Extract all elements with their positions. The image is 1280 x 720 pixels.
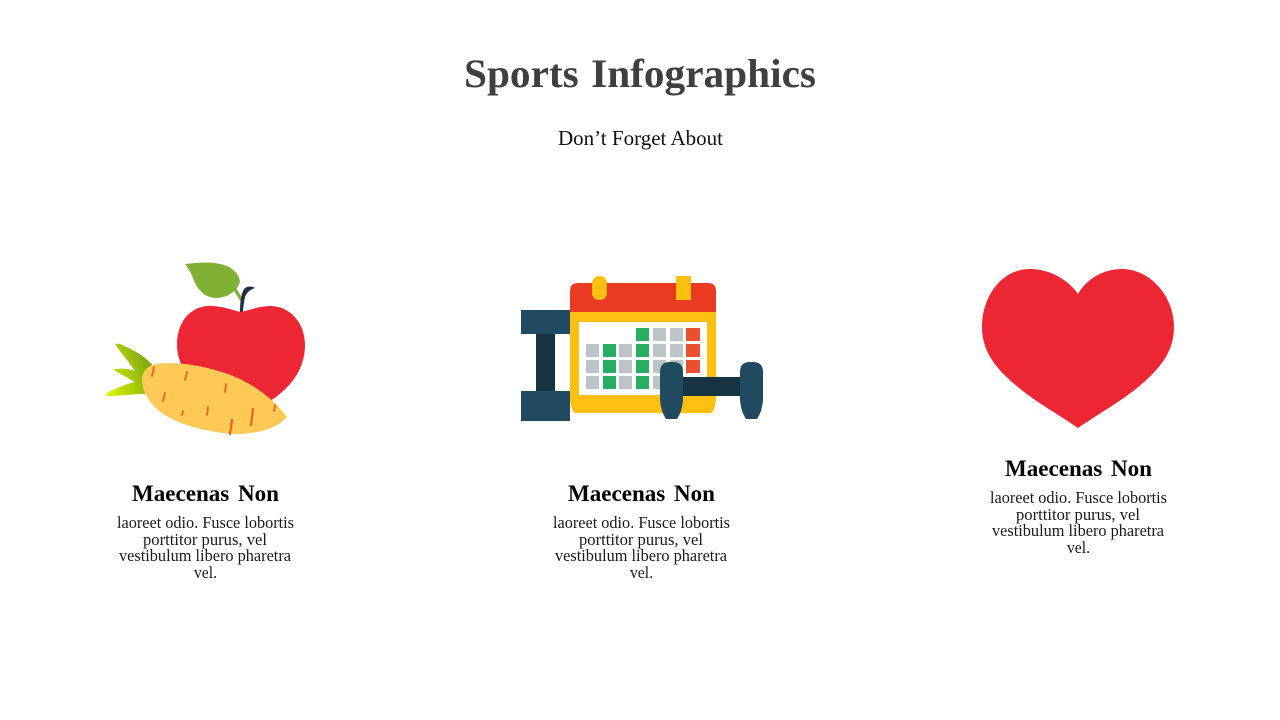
right dumbbell [660,362,763,419]
body text: laoreet odio. Fusce lobortis [117,513,294,532]
body text: vestibulum libero pharetra [555,546,728,565]
heading: Maecenas Non [568,481,715,506]
apple leaf [185,262,240,298]
calendar ring right [676,276,691,300]
panel: training schedule [521,276,763,582]
heading: Maecenas Non [132,481,279,506]
body text: vel. [1067,538,1090,557]
icon: calendar and dumbbells [521,276,763,421]
calendar body [570,312,716,413]
calendar grid [586,328,700,389]
body text [117,513,294,582]
calendar header [570,283,716,312]
body text [553,513,730,582]
subtitle: Don’t Forget About [558,126,723,150]
body text [990,488,1167,557]
body text: porttitor purus, vel [143,530,267,549]
body text: porttitor purus, vel [579,530,703,549]
left dumbbell [521,310,570,421]
body text: laoreet odio. Fusce lobortis [990,488,1167,507]
body text: vestibulum libero pharetra [992,521,1165,540]
body text: porttitor purus, vel [1016,505,1140,524]
carrot greens [106,344,153,396]
carrot marks [152,367,275,434]
body text: laoreet odio. Fusce lobortis [553,513,730,532]
apple leaf stem [233,288,244,304]
apple body [177,306,305,406]
apple stem [240,286,255,313]
title: Sports Infographics [464,51,816,96]
calendar ring left [592,276,607,300]
carrot body [142,363,287,434]
heading: Maecenas Non [1005,456,1152,481]
body text: vel. [194,563,217,582]
panel: nutrition [106,262,305,582]
body text: vestibulum libero pharetra [119,546,292,565]
calendar page [579,322,707,395]
icon: heart [982,269,1174,428]
icon: apple and carrot [106,262,305,434]
panel: heart health [982,269,1174,557]
body text: vel. [630,563,653,582]
